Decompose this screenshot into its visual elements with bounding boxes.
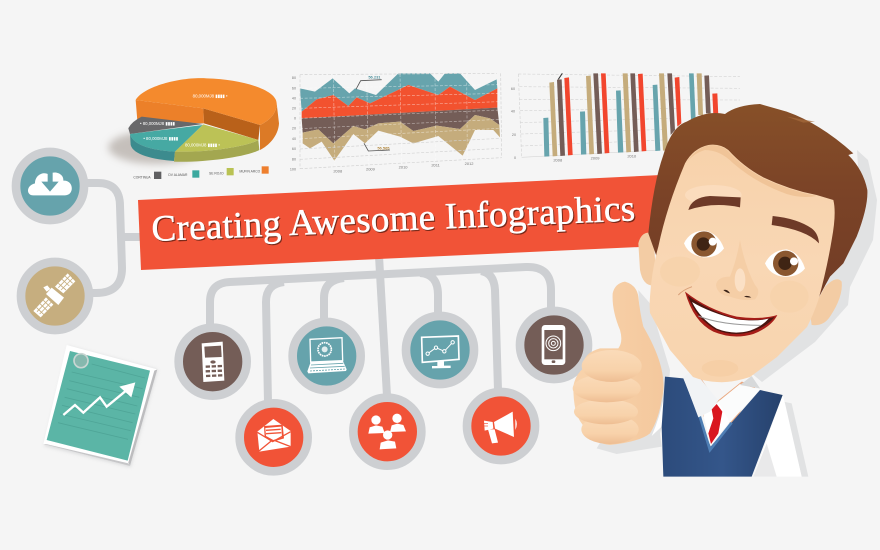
callout: lower value (364, 143, 390, 151)
icons: feature phone, laptop, envelope (179, 322, 361, 471)
pinned note with rising arrow (43, 345, 158, 467)
pin (74, 354, 88, 368)
area chart: 20 (292, 127, 296, 131)
icon: satellite (21, 262, 89, 330)
area chart: 80 (292, 76, 296, 80)
icon: feature phone (179, 328, 247, 396)
icon: megaphone (467, 392, 535, 460)
thumbs up hand (573, 282, 663, 445)
head shadow (750, 150, 877, 382)
character: man giving thumbs up (573, 104, 877, 477)
area chart: 2008 (333, 169, 343, 174)
area chart: 60 (292, 147, 296, 151)
pie chart: • 80,000MJ8 ▮▮▮▮ (140, 121, 175, 126)
connectors: left bracket (86, 183, 142, 293)
bar chart: 60 (511, 87, 515, 91)
hair (648, 104, 867, 300)
pie chart (108, 78, 279, 179)
area chart: 40 (292, 137, 296, 141)
pie legend: DV ALAMAR (168, 173, 188, 177)
area chart: 2011 (431, 163, 441, 168)
callout: upper value: 56.231 (368, 75, 381, 80)
bar chart: 2009 (591, 155, 600, 160)
connectors: lower tree (210, 256, 551, 402)
area chart: 0 (294, 117, 296, 121)
icon: smartphone (520, 311, 588, 379)
icon: envelope (240, 403, 308, 471)
collar (683, 369, 718, 417)
icon: monitor chart (406, 316, 474, 384)
callout: upper value (356, 75, 382, 89)
title banner (138, 175, 661, 270)
bar chart: 40 (511, 110, 515, 114)
callout: lower value: 56.565 (377, 145, 390, 150)
hairline shade (686, 145, 817, 197)
face (650, 145, 835, 382)
icon: cloud download (16, 152, 84, 220)
pie legend: MUFIN ARCO (239, 169, 261, 173)
icons: people, monitor, megaphone, smartphone (353, 311, 588, 466)
eyebrows (688, 196, 741, 210)
area chart: 60 (292, 86, 296, 90)
area chart: 2010 (399, 165, 408, 170)
pie legend: CORTINUA (133, 175, 151, 179)
icon: people group (353, 398, 421, 466)
area chart: 2012 (465, 161, 474, 166)
area chart: 80 (292, 158, 296, 162)
smile (678, 287, 777, 337)
pie legend: SE ROJO (209, 172, 224, 176)
area chart: 2009 (366, 167, 376, 172)
tie (708, 404, 722, 444)
pie chart: • 80,000MJ8 ▮▮▮▮ (143, 136, 178, 141)
nose (716, 240, 758, 300)
bar chart: 2008 (553, 157, 563, 162)
body shadow (597, 290, 808, 477)
area chart: 20 (292, 107, 296, 111)
title: Creating Awesome Infographics (151, 188, 636, 250)
cheeks (660, 257, 700, 287)
ears (638, 233, 842, 325)
area chart: 40 (292, 96, 296, 100)
area chart (290, 73, 502, 174)
bar chart (511, 73, 740, 162)
pie chart: 80,000MJ8 ▮▮▮▮ • (193, 93, 228, 98)
bar chart: 0 (514, 156, 516, 160)
area chart: 100 (290, 168, 296, 172)
title: Creating Awesome Infographics (152, 189, 637, 251)
shirt and vest (652, 367, 802, 477)
icon: laptop (293, 322, 361, 390)
left eye (684, 231, 724, 257)
bar chart: 20 (512, 133, 516, 137)
pie legend (133, 166, 269, 179)
right eye (765, 249, 805, 277)
bar chart: 2010 (627, 154, 637, 159)
pie chart: 80,000MJ8 ▮▮▮▮ • (185, 143, 220, 148)
